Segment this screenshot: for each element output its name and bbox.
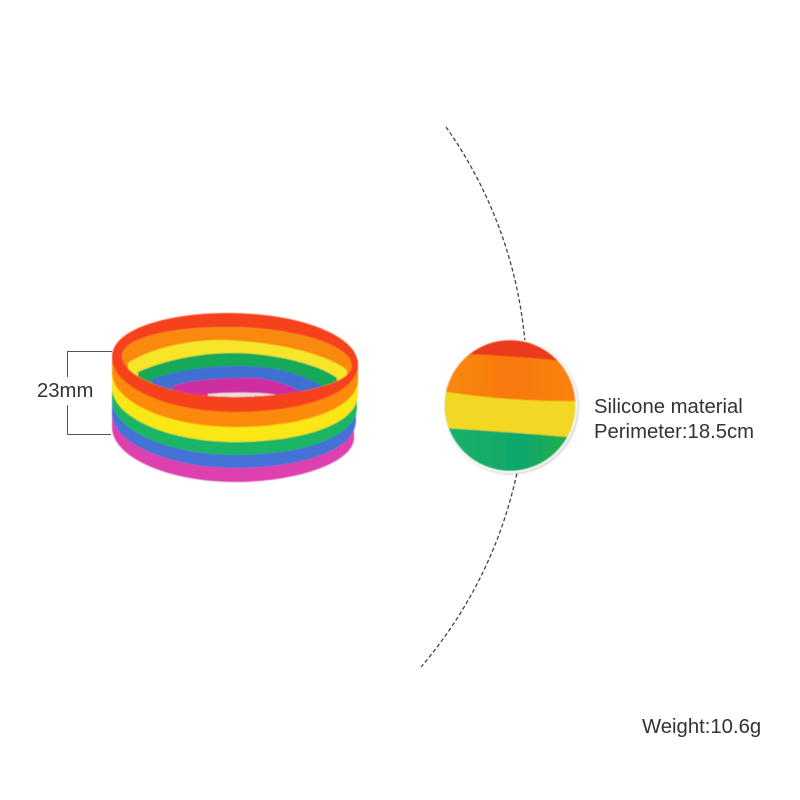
height label: 23mm xyxy=(37,380,93,402)
band outer stripes xyxy=(112,360,358,482)
perimeter text: Perimeter:18.5cm xyxy=(594,421,754,443)
rainbow silicone wristband xyxy=(110,313,360,482)
height dimension bracket xyxy=(68,352,112,434)
dashed arc xyxy=(421,127,527,667)
close-up stripes xyxy=(444,339,576,472)
detail circle: material close-up xyxy=(444,339,580,475)
white circle frame xyxy=(443,338,577,472)
weight text: Weight:10.6g xyxy=(642,716,761,738)
material and perimeter text xyxy=(594,396,754,443)
band red rim xyxy=(112,313,358,412)
band inner stripes xyxy=(121,326,352,398)
material text: Silicone material xyxy=(594,396,743,418)
